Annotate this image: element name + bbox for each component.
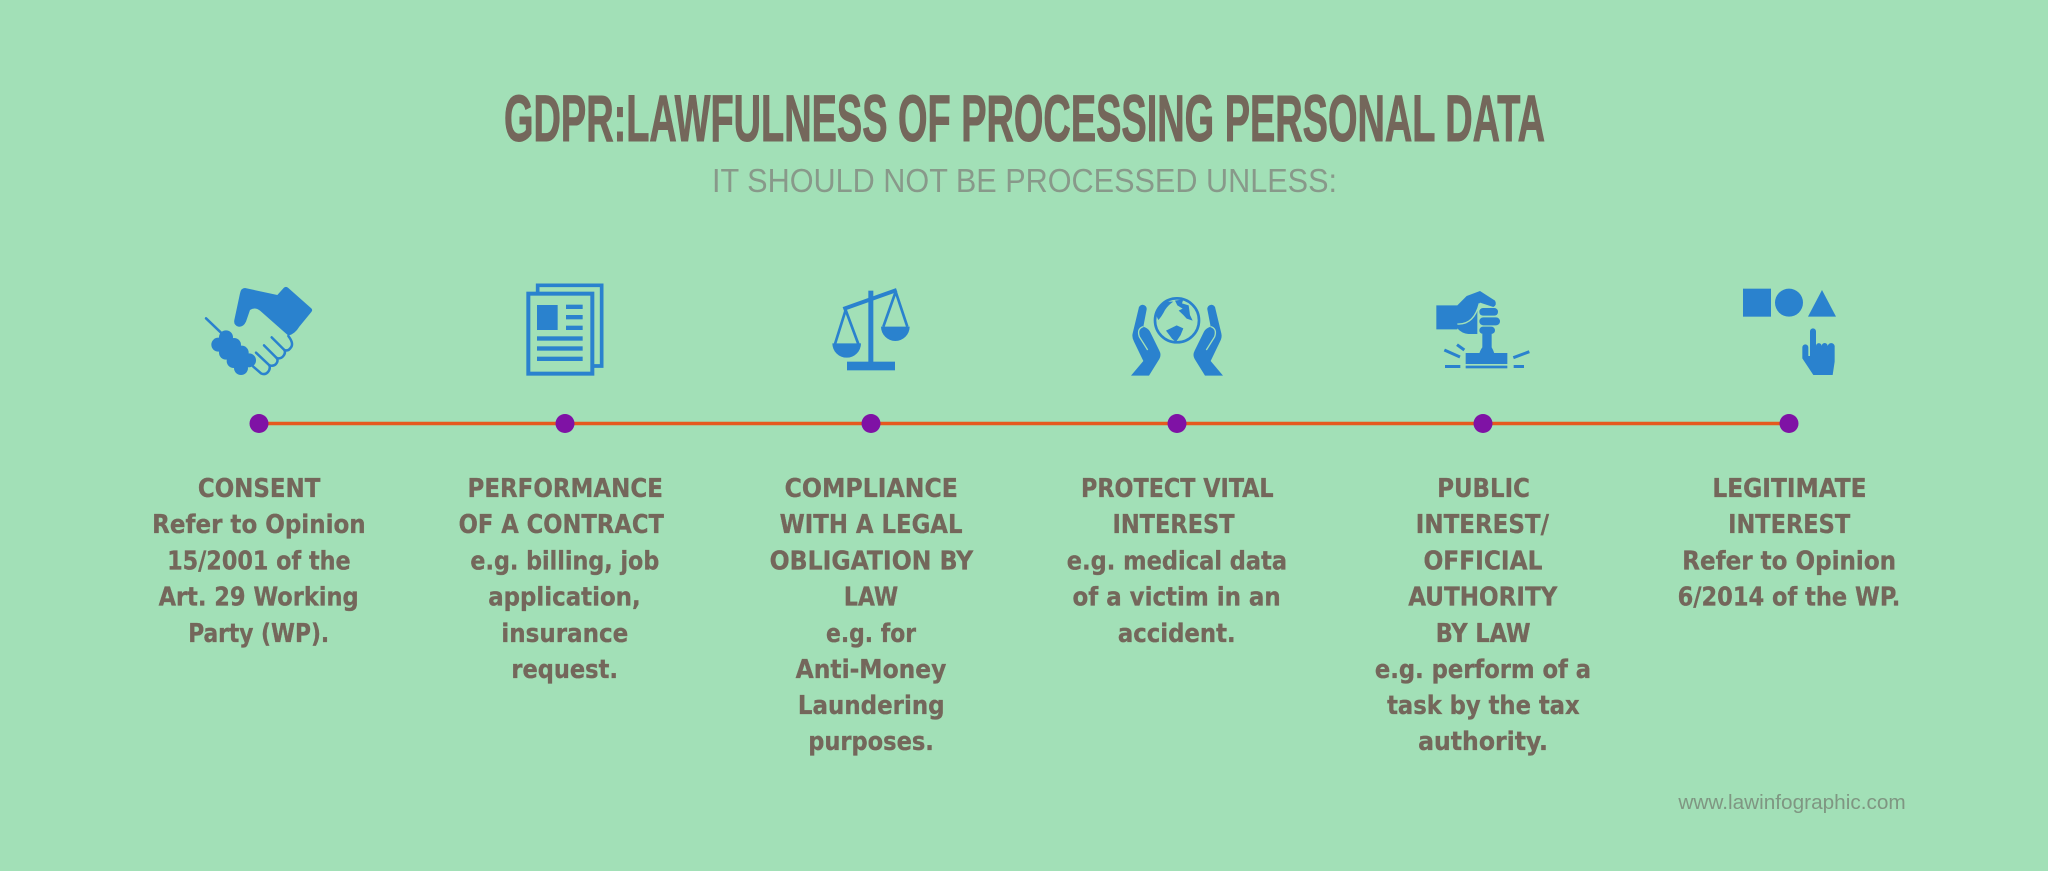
text: consent [152, 474, 366, 649]
icon: hand with stamp [1436, 291, 1529, 368]
text: contract: application, [488, 582, 641, 612]
subtitle: IT SHOULD NOT BE PROCESSED UNLESS: [712, 162, 1337, 199]
marker [862, 414, 880, 433]
marker [1474, 414, 1492, 433]
text: vital interest [1067, 474, 1287, 649]
text: legitimate interest: LEGITIMATE [1712, 474, 1867, 504]
text: legal obligation: COMPLIANCE [785, 474, 958, 504]
text: vital interest: of a victim in an [1072, 582, 1281, 612]
text: vital interest: PROTECT VITAL [1081, 474, 1274, 504]
text: public interest: BY LAW [1436, 619, 1531, 649]
icon: newspaper [528, 285, 602, 374]
text: public interest: e.g. perform of a [1375, 655, 1591, 685]
text: contract: OF A CONTRACT [459, 510, 664, 540]
text: contract [459, 474, 664, 685]
text: consent: CONSENT [198, 474, 321, 504]
panel: vital interest [1067, 298, 1287, 649]
text: legal obligation [770, 474, 974, 757]
panel: public interest [1375, 291, 1591, 757]
icon: shapes and pointing hand [1743, 289, 1836, 375]
panel: legitimate interest [1678, 289, 1900, 612]
text: legal obligation: purposes. [808, 727, 934, 757]
text: legal obligation: e.g. for [826, 619, 917, 649]
text: contract: PERFORMANCE [468, 474, 663, 504]
text: vital interest: e.g. medical data [1067, 546, 1287, 576]
icon: handshake [206, 287, 312, 375]
text: contract: insurance [501, 619, 628, 649]
text: public interest [1375, 474, 1591, 757]
website credit: www.lawinfographic.com [1677, 792, 1906, 814]
text: legal obligation: Anti-Money [796, 655, 946, 685]
text: legitimate interest: 6/2014 of the WP. [1678, 582, 1900, 612]
icon: hands holding globe [1131, 298, 1223, 376]
text: vital interest: accident. [1118, 619, 1236, 649]
text: public interest: PUBLIC [1437, 474, 1530, 504]
panel: legal obligation [770, 290, 974, 757]
text: public interest: OFFICIAL [1424, 546, 1543, 576]
text: legitimate interest [1678, 474, 1900, 612]
text: public interest: task by the tax [1387, 691, 1580, 721]
timeline line [259, 422, 1789, 425]
text: public interest: INTEREST/ [1416, 510, 1550, 540]
text: legal obligation: LAW [844, 582, 898, 612]
text: legal obligation: OBLIGATION BY [770, 546, 974, 576]
text: public interest: authority. [1418, 727, 1548, 757]
marker [1780, 414, 1798, 433]
text: contract: e.g. billing, job [470, 546, 659, 576]
text: consent: Art. 29 Working [159, 582, 359, 612]
text: contract: request. [511, 655, 618, 685]
marker [1168, 414, 1186, 433]
text: consent: 15/2001 of the [167, 546, 351, 576]
text: legitimate interest: Refer to Opinion [1682, 546, 1896, 576]
panel: contract [459, 285, 664, 685]
text: public interest: AUTHORITY [1408, 582, 1559, 612]
icon: scales [832, 290, 910, 370]
panel: consent [152, 287, 366, 649]
text: consent: Refer to Opinion [152, 510, 366, 540]
text: legal obligation: Laundering [798, 691, 945, 721]
text: legal obligation: WITH A LEGAL [780, 510, 963, 540]
text: legitimate interest: INTEREST [1728, 510, 1850, 540]
text: vital interest: INTEREST [1112, 510, 1235, 540]
marker [250, 414, 268, 433]
marker [556, 414, 574, 433]
text: consent: Party (WP). [188, 619, 329, 649]
